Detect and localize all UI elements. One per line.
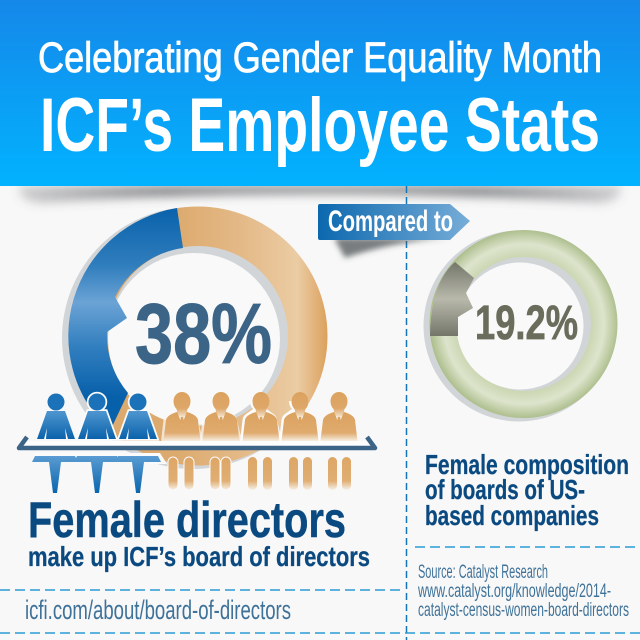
donut shadow xyxy=(62,207,324,469)
donut shadow xyxy=(424,230,614,422)
blue segment xyxy=(68,208,183,431)
donut chart: 38 percent xyxy=(62,206,328,469)
vertical dashed divider xyxy=(406,186,408,640)
blue legs xyxy=(32,453,167,493)
dashed line left xyxy=(0,589,402,591)
dashed line right xyxy=(415,546,640,548)
male directors xyxy=(161,392,358,441)
compared to tag xyxy=(318,204,470,258)
source text xyxy=(417,562,629,621)
header shadow xyxy=(19,186,621,203)
female composition caption xyxy=(425,449,629,531)
subheading: make up ICF’s board of directors xyxy=(28,541,370,572)
female directors xyxy=(37,394,157,439)
value 38%: 38% xyxy=(135,287,272,382)
board table with directors xyxy=(19,392,375,493)
source text: Source: Catalyst Research xyxy=(418,562,548,583)
dashed line bottom xyxy=(0,632,640,634)
header banner xyxy=(0,0,640,186)
table xyxy=(19,437,375,448)
orange ring xyxy=(68,206,328,466)
heading: female directors: Female directors xyxy=(28,492,346,548)
grey segment xyxy=(430,262,474,336)
url link: icfi.com/about/board-of-directors xyxy=(25,595,291,625)
orange legs xyxy=(168,457,351,490)
compared to tag: Compared to xyxy=(328,205,453,238)
green ring xyxy=(430,230,618,418)
value 19.2%: 19.2% xyxy=(475,297,578,350)
donut chart: 19.2 percent xyxy=(424,230,618,422)
female composition caption: of boards of US- xyxy=(425,474,585,505)
